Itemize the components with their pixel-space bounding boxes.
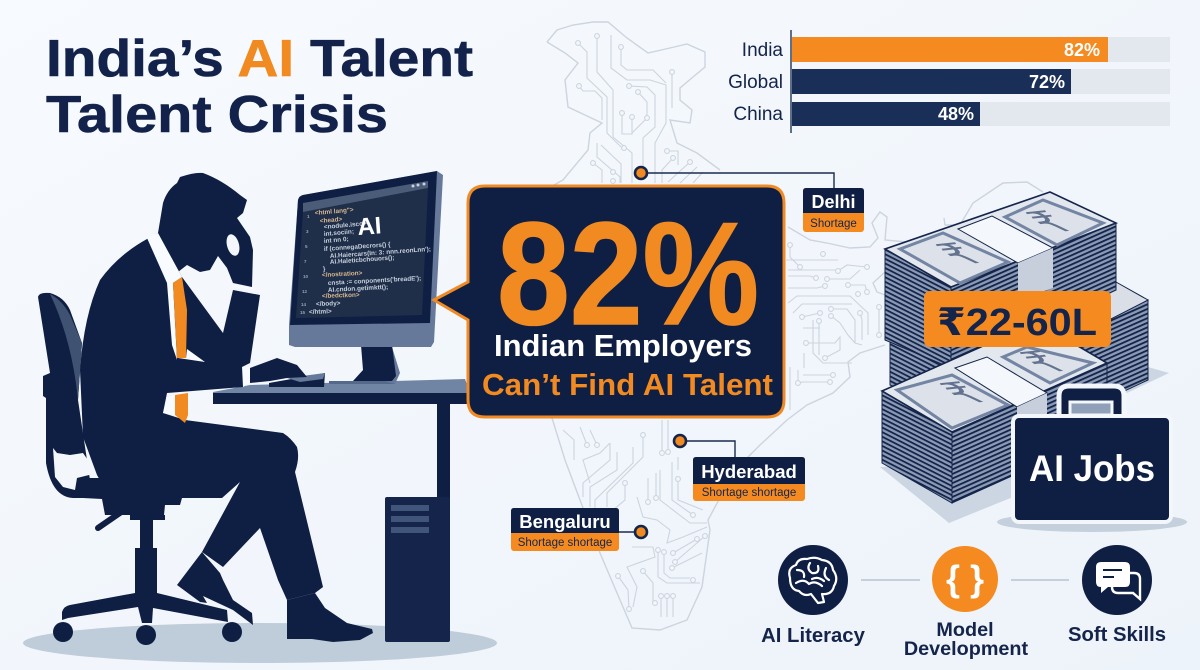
code on screen: <nodule.isco> bbox=[324, 220, 367, 231]
title bbox=[46, 30, 473, 144]
title: Talent Crisis bbox=[46, 86, 388, 144]
code on screen bbox=[300, 207, 431, 316]
map marker: Bengaluru bbox=[511, 508, 647, 551]
chair column and base bbox=[62, 515, 228, 623]
code on screen: 5 bbox=[305, 244, 308, 249]
keyboard bbox=[269, 373, 325, 387]
title: India’s AI Talent bbox=[46, 30, 473, 88]
orange tie bbox=[173, 277, 187, 358]
bar: Global bbox=[728, 69, 1071, 94]
code on screen: <head> bbox=[320, 216, 343, 225]
screen AI label: AI bbox=[357, 212, 382, 241]
code on screen: 15 bbox=[300, 310, 306, 315]
code on screen: 10 bbox=[303, 274, 309, 279]
code on screen: 14 bbox=[301, 302, 307, 307]
upper rupee marks bbox=[926, 205, 1081, 271]
shirt lower bbox=[163, 349, 205, 415]
bar: China bbox=[733, 102, 980, 126]
code on screen: </html> bbox=[309, 308, 332, 316]
skill: Model Development: Model bbox=[936, 619, 994, 641]
bar: India bbox=[742, 37, 1108, 62]
monitor stand bbox=[329, 345, 400, 384]
rear shoe bbox=[177, 552, 253, 625]
upper paper band bbox=[958, 216, 1053, 300]
bar backgrounds bbox=[792, 37, 1170, 126]
suit and legs bbox=[80, 233, 323, 600]
skill: AI Literacy: AI Literacy bbox=[761, 625, 866, 647]
skill: Soft Skills: Soft Skills bbox=[1068, 624, 1166, 646]
skills row bbox=[761, 545, 1166, 660]
shirt cuff bbox=[243, 367, 250, 387]
map marker: Delhi: Delhi bbox=[811, 192, 856, 212]
map marker: Bengaluru: Bengaluru bbox=[519, 511, 611, 532]
bar: India: 82% bbox=[1064, 40, 1100, 60]
code on screen: 3 bbox=[306, 229, 309, 234]
icon: brain bbox=[789, 558, 836, 603]
code on screen: <html lang"> bbox=[315, 207, 354, 217]
map marker: Delhi: Shortage bbox=[810, 218, 857, 230]
shirt collar bbox=[147, 233, 182, 360]
code on screen: 7 bbox=[304, 259, 307, 264]
briefcase: AI Jobs: AI Jobs bbox=[1029, 448, 1155, 489]
salary badge: ₹22-60L bbox=[937, 302, 1097, 344]
chair seat bbox=[78, 478, 225, 515]
briefcase: AI Jobs bbox=[997, 386, 1187, 532]
code on screen: AI.Haleticbchouors(); bbox=[330, 255, 395, 266]
lower note faces bbox=[897, 347, 1093, 428]
icon: chat bubbles bbox=[1096, 562, 1140, 599]
code on screen: AI.cndon.getimktt(); bbox=[328, 284, 388, 294]
skill: Model Development bbox=[904, 546, 1029, 660]
map marker: Bengaluru: Shortage shortage bbox=[518, 537, 612, 549]
lower rupee marks: ₹ bbox=[930, 376, 995, 410]
lower stack bbox=[882, 322, 1107, 503]
map marker: Hyderabad bbox=[674, 435, 805, 501]
India circuit map bbox=[545, 22, 1043, 630]
code on screen: int.sociin; bbox=[324, 228, 354, 238]
lower paper band bbox=[955, 357, 1047, 445]
lower rupee marks bbox=[930, 345, 1075, 410]
front shoe bbox=[287, 593, 373, 642]
skill: AI Literacy bbox=[761, 545, 866, 647]
code on screen: cnsta := conponents('breadE'); bbox=[328, 275, 421, 287]
code on screen: </body> bbox=[316, 300, 341, 308]
code on screen: } bbox=[323, 266, 326, 273]
icon: curly braces: { } bbox=[946, 558, 984, 599]
bar chart: employers unable to find AI talent bbox=[728, 30, 1170, 133]
map marker: Hyderabad: Hyderabad bbox=[701, 461, 797, 482]
money shadow bbox=[880, 367, 1169, 523]
map marker: Delhi bbox=[635, 167, 864, 232]
callout: 82% headline: Can’t Find AI Talent bbox=[482, 367, 773, 402]
chair back and frame bbox=[38, 293, 100, 498]
skill: Soft Skills bbox=[1068, 545, 1166, 646]
code on screen: 1 bbox=[307, 214, 310, 219]
lower tie bbox=[175, 393, 188, 423]
skill: Model Development: Development bbox=[904, 638, 1029, 660]
upper stack bbox=[885, 192, 1116, 368]
floor shadow bbox=[23, 623, 497, 663]
head and supporting hand bbox=[158, 173, 253, 287]
callout: 82% headline: 82% bbox=[497, 192, 759, 355]
computer monitor bbox=[289, 171, 443, 384]
bar: India: India bbox=[742, 40, 783, 61]
money stacks bbox=[880, 192, 1169, 523]
typing hand bbox=[250, 358, 307, 383]
salary badge bbox=[924, 291, 1111, 347]
bar: Global: 72% bbox=[1029, 72, 1065, 92]
office chair bbox=[38, 293, 242, 645]
bar: China: China bbox=[733, 104, 783, 125]
upper rupee marks: ₹ bbox=[926, 237, 991, 271]
person silhouette bbox=[80, 173, 373, 642]
bar: China: 48% bbox=[938, 104, 974, 124]
bar: Global: Global bbox=[728, 72, 783, 93]
code on screen: 12 bbox=[302, 289, 308, 294]
desk and computer tower bbox=[213, 379, 473, 642]
upper note faces bbox=[900, 200, 1103, 283]
upper rupee marks: ₹ bbox=[1016, 205, 1081, 239]
callout: 82% headline bbox=[434, 186, 784, 417]
middle stack bbox=[890, 282, 1148, 440]
map marker: Hyderabad: Shortage shortage bbox=[702, 487, 796, 499]
code on screen: if (connegaDecrors() { bbox=[324, 241, 391, 253]
code on screen: </nostration> bbox=[322, 270, 363, 279]
code on screen: </bedctkon> bbox=[322, 292, 360, 300]
callout: 82% headline: Indian Employers bbox=[494, 328, 752, 363]
code on screen: int nn 0; bbox=[324, 236, 349, 245]
code on screen: AI.Haiercars(In: 3: nnn.reonLnn'); bbox=[330, 246, 431, 260]
lower rupee marks: ₹ bbox=[1010, 345, 1075, 379]
